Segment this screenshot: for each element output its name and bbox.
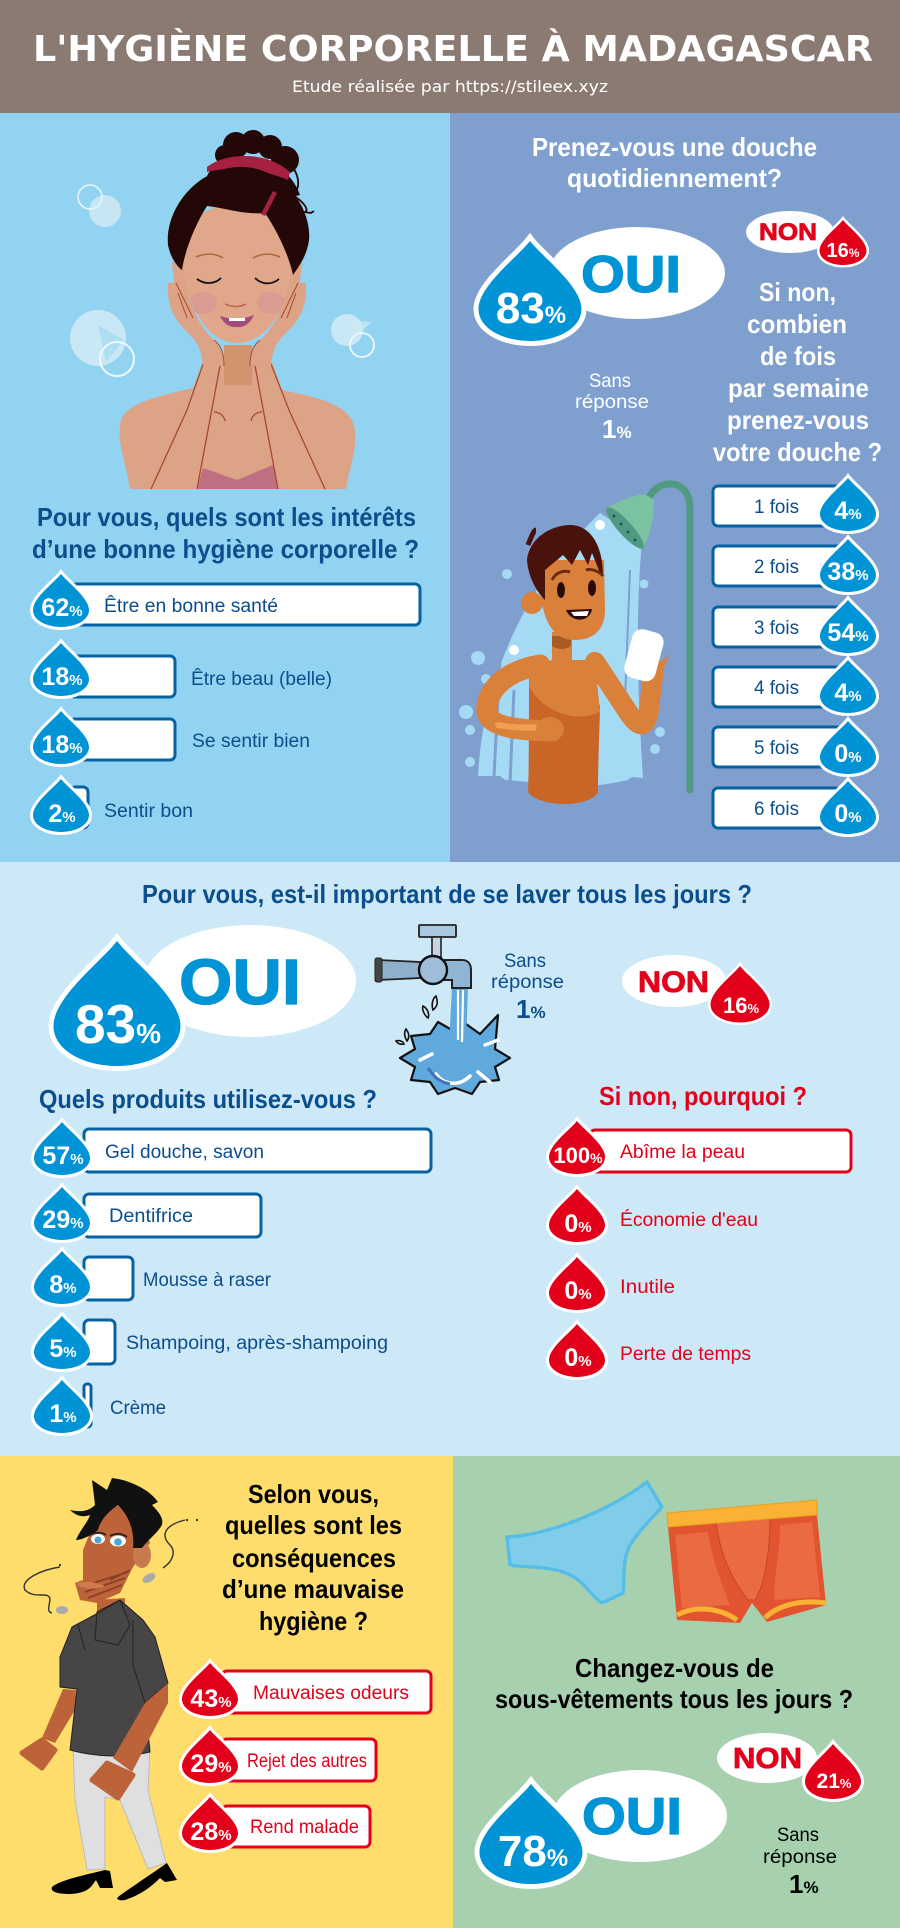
bar: dentifrice 29%: 29% — [42, 1206, 84, 1234]
row: inutile 0%: 0% — [564, 1277, 592, 1305]
bar: être en bonne santé 62%: Être en bonne santé — [104, 595, 278, 617]
non 16%: NON — [759, 219, 817, 246]
bar: 3 fois 54% — [713, 600, 876, 653]
bar: gel douche 57% — [34, 1122, 431, 1175]
bar: 4 fois 4%: 4 fois — [754, 678, 799, 699]
header banner — [0, 0, 900, 113]
no answer 1%: 1% — [789, 1869, 819, 1899]
panel: washing every day — [0, 862, 900, 1456]
row: économie d'eau 0%: 0% — [564, 1210, 592, 1238]
bar: 5 fois 0% — [713, 721, 876, 774]
bar: 1 fois 4% — [713, 478, 876, 531]
bar: mauvaises odeurs 43%: 43% — [190, 1685, 232, 1713]
bar: rend malade 28% — [182, 1797, 370, 1850]
bar: crème 1% — [34, 1380, 166, 1433]
oui 83%: OUI — [179, 946, 301, 1018]
non 21%: 21% — [817, 1770, 852, 1793]
bar: 3 fois 54%: 3 fois — [754, 618, 799, 639]
non 16% — [746, 211, 866, 265]
illustration: unkempt man with flies — [22, 1478, 198, 1900]
bar: abîme la peau 100% — [549, 1121, 851, 1174]
panel: changing underwear: sous-vêtements tous les jours ? — [495, 1684, 853, 1714]
no answer 1%: Sans — [504, 951, 546, 972]
bar: 2 fois 38%: 2 fois — [754, 557, 799, 578]
heading: how many times per week: Si non, — [759, 277, 836, 307]
bar: se sentir bien 18%: Se sentir bien — [192, 731, 310, 752]
oui 78%: OUI — [582, 1788, 682, 1846]
bar: rejet des autres 29%: Rejet des autres — [247, 1751, 367, 1772]
no answer 1% — [763, 1825, 837, 1899]
heading: how many times per week: de fois — [760, 341, 836, 371]
bar: dentifrice 29%: Dentifrice — [109, 1206, 193, 1227]
bar: mauvaises odeurs 43%: Mauvaises odeurs — [253, 1683, 409, 1704]
row: économie d'eau 0% — [549, 1189, 758, 1242]
bar: rend malade 28%: Rend malade — [250, 1817, 359, 1838]
bar: être en bonne santé 62%: 62% — [41, 594, 83, 622]
no answer 1% — [491, 951, 564, 1024]
oui 78% — [480, 1770, 727, 1884]
row: perte de temps 0% — [549, 1324, 751, 1377]
heading: why not: Si non, pourquoi ? — [599, 1081, 807, 1111]
no answer 1%: réponse — [575, 392, 649, 413]
bar: shampoing 5% — [34, 1316, 388, 1369]
bar: 5 fois 0%: 0% — [834, 740, 862, 768]
heading: consequences: Selon vous, — [248, 1479, 379, 1509]
bar: être beau 18%: Être beau (belle) — [191, 668, 332, 690]
no answer 1%: réponse — [763, 1847, 837, 1868]
bar: abîme la peau 100%: Abîme la peau — [620, 1142, 745, 1163]
bar: rejet des autres 29%: 29% — [190, 1750, 232, 1778]
non 21%: NON — [733, 1743, 802, 1775]
oui 83% — [478, 227, 725, 341]
heading: underwear question: Changez-vous de — [575, 1653, 774, 1683]
title: L'HYGIÈNE CORPORELLE À MADAGASCAR — [33, 28, 873, 70]
bar: 1 fois 4%: 4% — [834, 497, 862, 525]
bar: sentir bon 2% — [33, 779, 193, 832]
bar: être beau 18%: 18% — [41, 663, 83, 691]
bar: sentir bon 2%: Sentir bon — [104, 801, 193, 822]
bar: 4 fois 4% — [713, 660, 876, 713]
row: inutile 0%: Inutile — [620, 1277, 675, 1298]
no answer 1%: 1% — [602, 414, 632, 444]
bar: 2 fois 38% — [713, 539, 876, 592]
heading: products: Quels produits utilisez-vous ? — [39, 1084, 377, 1114]
row: économie d'eau 0%: Économie d'eau — [620, 1210, 758, 1231]
bar: se sentir bien 18%: 18% — [41, 731, 83, 759]
panel: daily shower — [450, 113, 900, 862]
heading: how many times per week: combien — [747, 309, 847, 339]
bar: mousse à raser 8%: Mousse à raser — [143, 1270, 272, 1291]
no answer 1% — [575, 371, 649, 444]
bar: sentir bon 2%: 2% — [48, 800, 76, 828]
bar: être en bonne santé 62% — [33, 574, 420, 627]
heading: consequences: hygiène ? — [259, 1606, 368, 1636]
heading: how many times per week: prenez-vous — [727, 405, 869, 435]
illustration: tap with water splash — [375, 925, 510, 1094]
panel: interests of good hygiene — [0, 113, 450, 862]
oui 83%: 83% — [75, 993, 161, 1055]
bar: être beau 18% — [33, 643, 332, 697]
row: inutile 0% — [549, 1257, 675, 1310]
bar: rejet des autres 29% — [182, 1730, 376, 1783]
bar: abîme la peau 100%: 100% — [553, 1143, 603, 1168]
bar: mauvaises odeurs 43% — [182, 1663, 431, 1716]
bar: 1 fois 4%: 1 fois — [754, 497, 799, 518]
heading: consequences: quelles sont les — [225, 1510, 402, 1540]
heading: daily shower question: Prenez-vous une douche — [532, 132, 817, 162]
bar: 4 fois 4%: 4% — [834, 679, 862, 707]
bar: gel douche 57%: Gel douche, savon — [105, 1142, 264, 1163]
heading: how many times per week: votre douche ? — [713, 437, 882, 467]
subtitle: Etude réalisée par https://stileex.xyz — [292, 77, 608, 96]
bar: 2 fois 38%: 38% — [827, 558, 869, 586]
non 21% — [717, 1733, 861, 1799]
bar: gel douche 57%: 57% — [42, 1142, 84, 1170]
illustration: woman with soap bubbles — [70, 130, 374, 489]
bar: 6 fois 0% — [713, 781, 876, 834]
row: perte de temps 0%: Perte de temps — [620, 1344, 751, 1365]
row: perte de temps 0%: 0% — [564, 1344, 592, 1372]
bar: shampoing 5%: 5% — [49, 1335, 77, 1363]
panel: changing underwear — [453, 1456, 900, 1928]
bar: shampoing 5%: Shampoing, après-shampoing — [126, 1333, 388, 1354]
non 16% — [622, 955, 770, 1022]
panel: interests of good hygiene: d’une bonne hygiène corporelle ? — [32, 534, 419, 564]
no answer 1%: Sans — [589, 371, 631, 392]
bar: 6 fois 0%: 0% — [834, 800, 862, 828]
heading: consequences: d’une mauvaise — [222, 1574, 404, 1604]
oui 83% — [54, 925, 356, 1066]
panel: consequences of poor hygiene — [0, 1456, 453, 1928]
no answer 1%: réponse — [491, 972, 564, 993]
heading: consequences: conséquences — [232, 1543, 396, 1573]
bar: rend malade 28%: 28% — [190, 1818, 232, 1846]
illustration: underwear — [507, 1482, 826, 1623]
heading: how many times per week: par semaine — [728, 373, 869, 403]
bar: 5 fois 0%: 5 fois — [754, 738, 799, 759]
bar: crème 1%: 1% — [49, 1400, 77, 1428]
no answer 1%: Sans — [777, 1825, 819, 1846]
non 16%: 16% — [723, 993, 759, 1018]
bar: mousse à raser 8% — [34, 1251, 272, 1304]
heading: how many times per week — [713, 277, 882, 467]
bar: crème 1%: Crème — [110, 1398, 166, 1419]
no answer 1%: 1% — [516, 994, 546, 1024]
oui 83%: OUI — [581, 246, 681, 304]
bar: dentifrice 29% — [34, 1187, 261, 1240]
non 16%: NON — [638, 966, 709, 999]
heading: consequences — [222, 1479, 404, 1636]
panel: daily shower: quotidiennement? — [567, 163, 782, 193]
non 16%: 16% — [827, 240, 860, 262]
heading: interests: Pour vous, quels sont les intérêts — [37, 502, 416, 532]
oui 78%: 78% — [498, 1827, 568, 1876]
bar: 6 fois 0%: 6 fois — [754, 799, 799, 820]
bar: mousse à raser 8%: 8% — [49, 1271, 77, 1299]
bar: 3 fois 54%: 54% — [827, 619, 869, 647]
bar: se sentir bien 18% — [33, 711, 310, 764]
illustration: man showering — [459, 484, 690, 804]
heading: important to wash: Pour vous, est-il important de se laver tous les jours ? — [142, 879, 752, 909]
oui 83%: 83% — [496, 284, 566, 333]
